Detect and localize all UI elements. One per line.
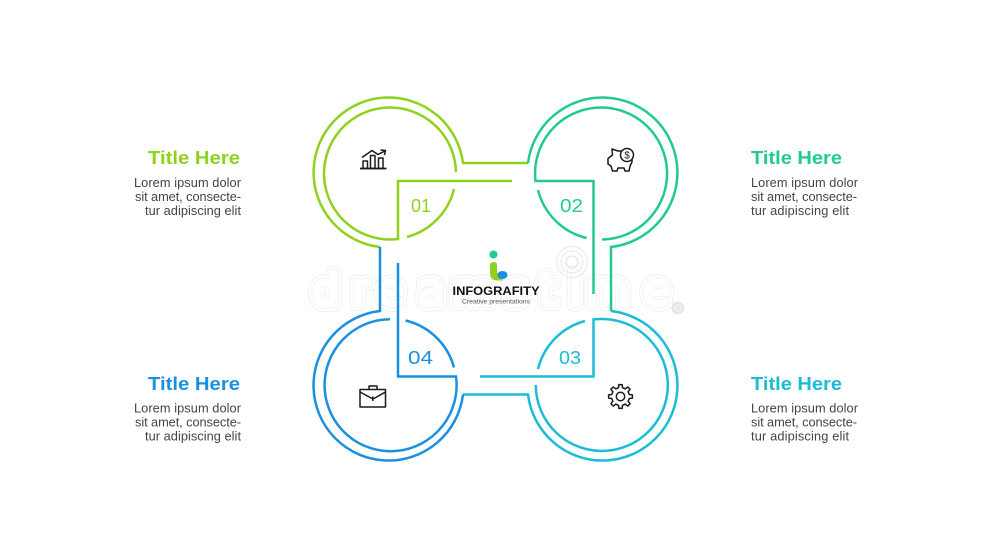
body text: Lorem ipsum dolor: [751, 175, 859, 190]
logo: [452, 250, 540, 306]
number 04: 04: [408, 347, 433, 368]
panel: step 03: [463, 311, 677, 461]
inner ring and corner 02: [535, 108, 667, 294]
quarter arc 01: [407, 189, 454, 237]
quarter arc 03: [538, 321, 585, 369]
text block: top right: [751, 147, 859, 218]
quarter arc 02: [538, 190, 586, 238]
inner ring and corner 03: [480, 319, 668, 451]
logo mark: [490, 250, 508, 280]
icon: piggy bank: [608, 148, 634, 171]
icon: growth chart: [360, 150, 386, 168]
heading: Title Here: [148, 373, 240, 394]
heading: Title Here: [751, 147, 842, 168]
body text: tur adipiscing elit: [145, 203, 241, 218]
watermark: dreamstime: [312, 265, 670, 316]
body text: tur adipiscing elit: [145, 428, 241, 444]
logo tagline: Creative presentations: [462, 298, 531, 306]
icon: piggy bank: $: [624, 150, 630, 162]
number 03: 03: [559, 347, 581, 368]
watermark: dreamstime: [312, 265, 670, 316]
icon: briefcase: [360, 386, 386, 407]
body text: tur adipiscing elit: [751, 428, 849, 444]
body text: sit amet, consecte-: [751, 189, 857, 204]
text block: bottom left: [134, 373, 242, 444]
outer ring 01: [314, 97, 528, 247]
watermark: dreamstime: [312, 265, 670, 316]
inner ring and corner 04: [325, 263, 457, 451]
body text: sit amet, consecte-: [135, 189, 241, 204]
watermark: dreamstime: [312, 265, 670, 316]
panel: step 01: [314, 97, 528, 247]
number 02: 02: [560, 195, 583, 216]
body text: Lorem ipsum dolor: [134, 175, 242, 190]
heading: Title Here: [751, 373, 842, 394]
body text: Lorem ipsum dolor: [751, 400, 859, 416]
body text: tur adipiscing elit: [751, 203, 849, 218]
outer ring 02: [528, 97, 677, 311]
quarter arc 04: [406, 320, 454, 368]
outer ring 03: [463, 311, 677, 461]
logo name: INFOGRAFITY: [452, 284, 540, 298]
number 01: 01: [411, 195, 431, 216]
panel: step 04: [314, 247, 463, 461]
body text: sit amet, consecte-: [751, 414, 857, 430]
body text: sit amet, consecte-: [135, 414, 241, 430]
panel: step 02: [528, 97, 677, 311]
text block: top left: [134, 147, 242, 218]
body text: Lorem ipsum dolor: [134, 400, 242, 416]
text block: bottom right: [751, 373, 859, 444]
outer ring 04: [314, 247, 463, 461]
inner ring and corner 01: [324, 107, 512, 239]
heading: Title Here: [148, 147, 240, 168]
icon: gear: [609, 385, 632, 408]
